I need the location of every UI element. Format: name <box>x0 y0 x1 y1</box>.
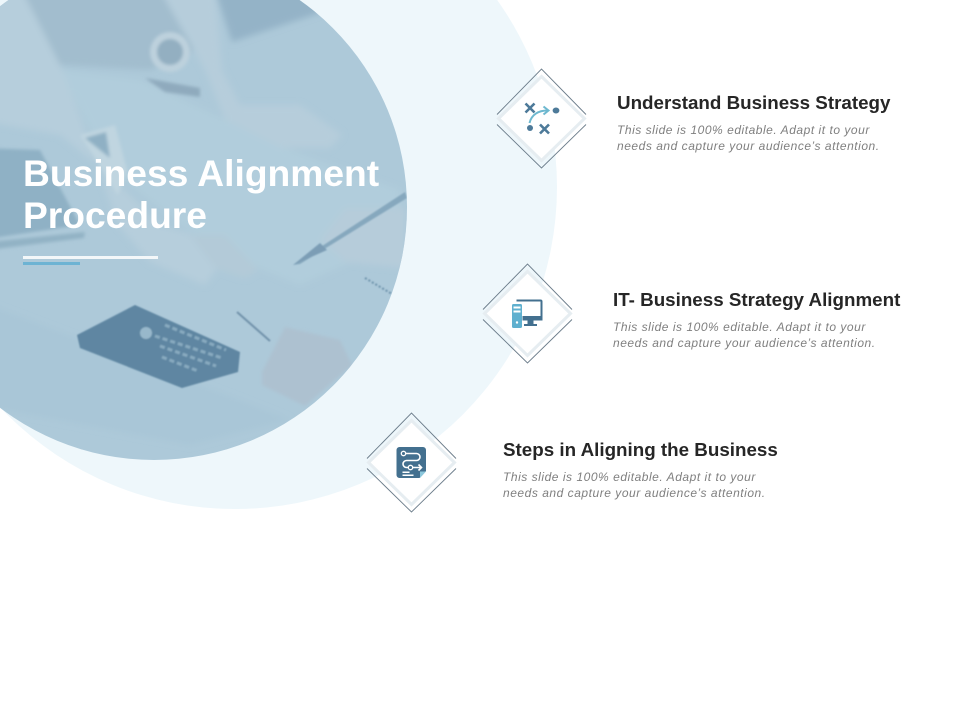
icon: desktop computer <box>512 300 542 328</box>
text block 3: This slide is 100% editable. Adapt it to your <box>503 470 756 484</box>
diamond 1 with strategy icon <box>497 69 586 168</box>
text block 3: Steps in Aligning the Business <box>503 439 778 460</box>
title: Procedure <box>23 194 207 236</box>
text block 2: needs and capture your audience’s attention. <box>613 336 876 350</box>
calculator <box>77 305 240 388</box>
text block 2: IT- Business Strategy Alignment <box>613 289 900 310</box>
text block 1: This slide is 100% editable. Adapt it to your <box>617 123 870 137</box>
title: Business Alignment <box>23 152 379 194</box>
title underline <box>23 256 158 265</box>
text block 3: needs and capture your audience’s attention. <box>503 486 766 500</box>
text block 1: needs and capture your audience’s attention. <box>617 139 880 153</box>
text block 3 <box>503 439 778 500</box>
icon: play diagram <box>526 104 559 134</box>
text block 2 <box>613 289 900 350</box>
diamond 3 with process icon <box>367 413 456 512</box>
text block 1 <box>617 92 890 153</box>
background pale circle <box>0 0 557 509</box>
text block 2: This slide is 100% editable. Adapt it to your <box>613 320 866 334</box>
icon: process document <box>396 447 426 478</box>
text block 1: Understand Business Strategy <box>617 92 890 113</box>
photo circle: desk with hands and calculator <box>0 0 420 470</box>
diamond 2 with computer icon <box>483 264 572 363</box>
title <box>23 152 379 236</box>
